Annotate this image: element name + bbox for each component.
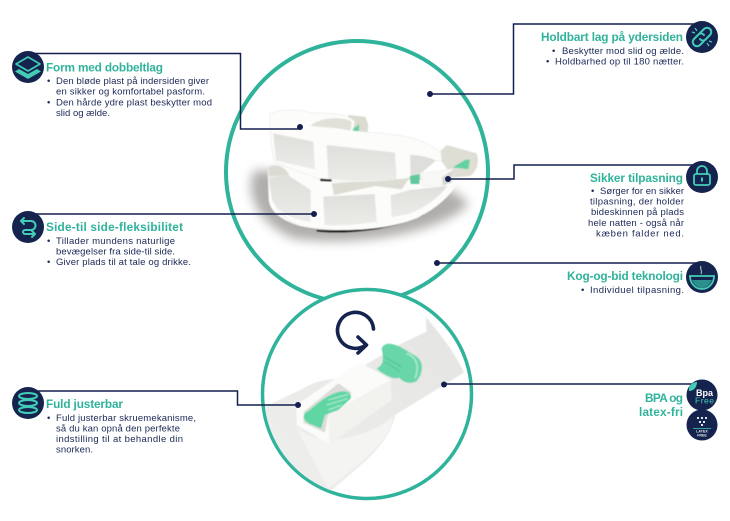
panel: fuld justerbar: Fuld justerbar skruemekanisme, — [56, 413, 196, 424]
green knob — [377, 344, 422, 383]
panel: kog-og-bid teknologi: Individuel tilpasning. — [590, 285, 684, 296]
product photo: mouthguard — [251, 110, 478, 241]
panel: form med dobbeltlag: Form med dobbeltlag — [46, 60, 163, 74]
panel: bpa og latex-fri: latex-fri — [639, 405, 683, 419]
panel: fuld justerbar: så du kan opnå den perfekte — [56, 424, 180, 434]
panel: sikker tilpasning: Sikker tilpasning — [590, 171, 683, 185]
back screw housing — [348, 115, 368, 139]
icon: padlock — [686, 161, 718, 193]
screw block — [296, 362, 392, 444]
rotation arrow — [338, 312, 374, 353]
panel: side-til side-fleksibilitet: Side-til side-fleksibilitet — [46, 220, 183, 234]
leader lines — [28, 24, 702, 405]
big teal circle — [226, 41, 488, 303]
panel: side-til side-fleksibilitet: bevægelser fra side-til side. — [56, 246, 175, 258]
icon: latex free — [686, 410, 718, 440]
panel: sikker tilpasning: kæben falder ned. — [596, 228, 684, 240]
panel: bpa og latex-fri: BPA og — [645, 391, 683, 405]
panel: holdbart lag: • — [552, 46, 555, 57]
icon: BPA free — [686, 380, 718, 410]
leader line dots — [295, 91, 451, 408]
panel: form med dobbeltlag: • — [47, 98, 50, 108]
panel: holdbart lag: Holdbart lag på ydersiden — [541, 30, 683, 44]
panel: sikker tilpasning — [588, 171, 684, 240]
icon: bowl — [686, 261, 718, 293]
tray body — [260, 317, 464, 492]
panel: sikker tilpasning: bideskinnen på plads — [591, 207, 684, 218]
panel: side-til side-fleksibilitet: Giver plads til at tale og drikke. — [56, 257, 191, 268]
icon: screw coil — [12, 387, 44, 419]
lower tray — [268, 165, 457, 232]
upper tray — [270, 110, 454, 182]
panel: fuld justerbar — [46, 397, 196, 456]
icon: chain link — [686, 21, 718, 53]
panel: fuld justerbar: Fuld justerbar — [46, 397, 123, 411]
small teal circle — [262, 290, 472, 498]
panel: form med dobbeltlag — [46, 60, 212, 119]
panel: fuld justerbar: snorken. — [56, 444, 93, 456]
panel: bpa og latex-fri — [639, 391, 683, 419]
panel: holdbart lag: Beskytter mod slid og ælde. — [562, 46, 684, 57]
panel: side-til side-fleksibilitet: • — [47, 236, 50, 247]
panel: form med dobbeltlag: Den hårde ydre plast beskytter mod — [56, 98, 212, 108]
icon: latex free: LATEX — [696, 430, 708, 434]
icon: layers — [12, 51, 44, 83]
panel: form med dobbeltlag: en sikker og komfortabel pasform. — [56, 86, 205, 98]
panel: side-til side-fleksibilitet: Tillader mundens naturlige — [56, 236, 175, 247]
shadow — [251, 170, 468, 241]
panel: form med dobbeltlag: slid og ælde. — [56, 108, 110, 119]
icon: BPA free: Free — [695, 396, 714, 406]
product detail photo: adjustment screw — [260, 317, 464, 492]
icon: side-to-side arrows — [12, 211, 44, 243]
front screw housing — [410, 145, 478, 187]
panel: kog-og-bid teknologi: • — [581, 285, 584, 296]
panel: holdbart lag: Holdbarhed op til 180 nætter. — [555, 56, 684, 68]
panel: form med dobbeltlag: Den bløde plast på indersiden giver — [56, 76, 209, 87]
icon: latex free: FREE — [697, 434, 707, 438]
panel: form med dobbeltlag: • — [47, 76, 50, 87]
panel: sikker tilpasning: tilpasning, der holder — [590, 196, 684, 208]
panel: holdbart lag: • — [546, 56, 549, 68]
panel: sikker tilpasning: hele natten - også når — [588, 218, 684, 229]
panel: fuld justerbar: • — [47, 413, 50, 424]
panel: side-til side-fleksibilitet: • — [47, 257, 50, 268]
icon: BPA free: Bpa — [696, 388, 714, 398]
panel: sikker tilpasning: • — [591, 186, 594, 197]
panel: side-til side-fleksibilitet — [46, 220, 191, 268]
panel: sikker tilpasning: Sørger for en sikker — [600, 186, 684, 197]
panel: holdbart lag — [541, 30, 684, 68]
panel: fuld justerbar: indstilling til at behandle din — [56, 434, 183, 445]
panel: kog-og-bid teknologi: Kog-og-bid teknologi — [567, 269, 683, 283]
panel: kog-og-bid teknologi — [567, 269, 684, 296]
